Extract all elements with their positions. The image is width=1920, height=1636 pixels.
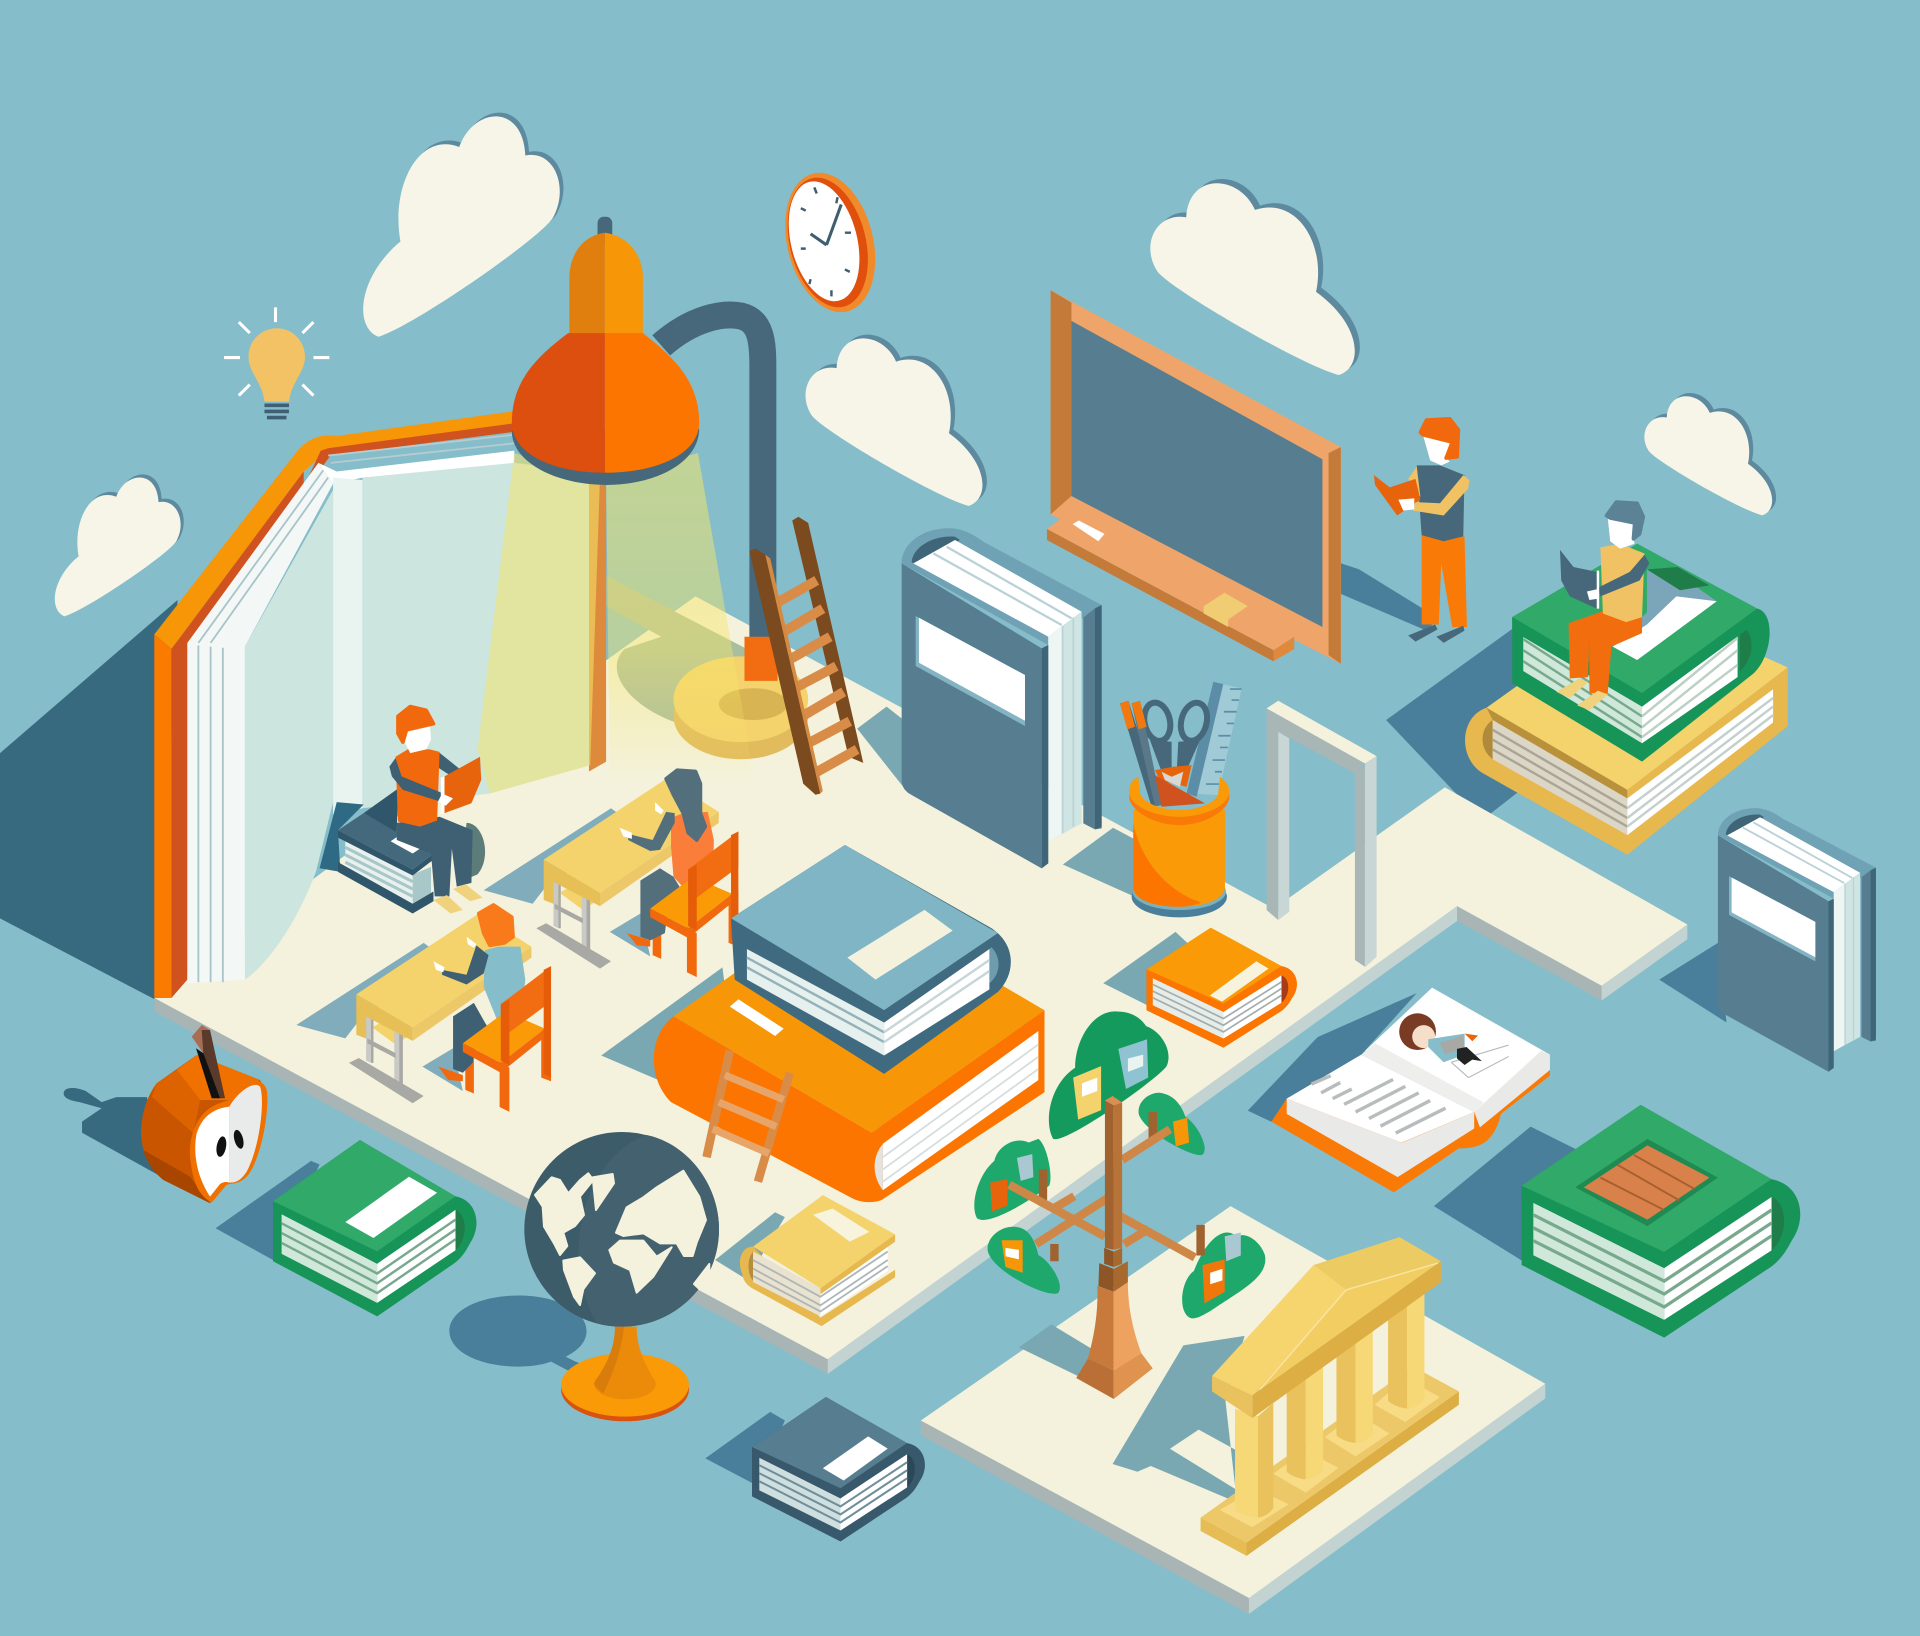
globe bbox=[524, 1132, 719, 1421]
column 1 bbox=[1220, 1403, 1289, 1527]
boy shoe bbox=[438, 1067, 463, 1081]
held book bbox=[444, 757, 481, 813]
left page block bbox=[1287, 1099, 1401, 1177]
desk lamp arm bbox=[661, 315, 763, 649]
pencil cup bbox=[1120, 682, 1242, 917]
floor shadow and cloth bbox=[320, 802, 364, 872]
apple face right bbox=[229, 1085, 262, 1183]
floor shadow: pencil cup bbox=[1063, 828, 1134, 896]
continents bbox=[535, 1171, 709, 1305]
face bbox=[1608, 518, 1635, 549]
upper arm bbox=[1408, 467, 1420, 497]
cloud 1 bbox=[363, 113, 563, 337]
pencils bbox=[1120, 701, 1162, 807]
boy body bbox=[484, 947, 525, 1026]
cover top bright edge bbox=[154, 410, 520, 649]
cloud 2 bbox=[55, 474, 184, 616]
boy legs bbox=[453, 1003, 527, 1073]
column 2 bbox=[1273, 1359, 1338, 1493]
back page surface bbox=[362, 463, 589, 808]
cloud 5 bbox=[1644, 393, 1776, 515]
shadow: apple bbox=[64, 1088, 159, 1176]
girl shoe bbox=[627, 933, 650, 947]
large green book with bench bbox=[1522, 1105, 1800, 1338]
shadow: right book stack bbox=[1386, 625, 1592, 820]
large open book bbox=[154, 410, 606, 998]
big orange book bbox=[654, 894, 1044, 1202]
small dark book bbox=[752, 1397, 925, 1542]
apple top facet bbox=[177, 1055, 260, 1100]
apple body bbox=[141, 1055, 267, 1203]
open book on ground bbox=[1271, 988, 1550, 1192]
small orange book bbox=[1146, 928, 1297, 1048]
shoes bbox=[433, 884, 482, 914]
torso bbox=[1600, 544, 1644, 622]
small yellow book bbox=[740, 1195, 895, 1326]
column 4 bbox=[1375, 1294, 1440, 1422]
floor shadow: blue book bbox=[857, 707, 909, 794]
green book left bbox=[273, 1140, 476, 1316]
wood panel bbox=[1575, 1139, 1718, 1226]
girl arm bbox=[628, 812, 675, 851]
cover side red bbox=[171, 643, 187, 998]
shadow: green book left bbox=[216, 1161, 320, 1260]
tree shadow bbox=[1019, 1324, 1114, 1378]
tree books bbox=[990, 1039, 1241, 1303]
apple mid facet bbox=[152, 1070, 200, 1133]
torso bbox=[396, 749, 440, 827]
door frame bbox=[1267, 701, 1377, 967]
temple bbox=[1201, 1237, 1459, 1556]
cover side orange bbox=[154, 634, 171, 998]
floor shadow: small orange book bbox=[1103, 932, 1194, 1007]
seeds bbox=[215, 1136, 228, 1158]
ladder by lamp bbox=[749, 517, 863, 795]
base ring bbox=[1132, 876, 1227, 917]
ruler bbox=[1188, 682, 1242, 795]
student seated on book with orange book bbox=[320, 707, 485, 914]
shoes bbox=[1556, 678, 1608, 710]
lamp base shadow on floor bbox=[606, 576, 759, 735]
gutter column bbox=[333, 478, 362, 814]
desk and student A bbox=[484, 770, 738, 977]
trunk bbox=[1105, 1101, 1114, 1250]
girl hair bbox=[666, 770, 705, 840]
branches bbox=[1009, 1112, 1201, 1261]
stand bbox=[561, 1357, 689, 1421]
reader standing bbox=[1374, 419, 1469, 643]
floor shadow: orange book bbox=[601, 967, 735, 1102]
eraser bbox=[1204, 593, 1248, 627]
cover bbox=[1271, 1055, 1550, 1192]
chalk bbox=[1073, 520, 1104, 541]
back arm bbox=[435, 752, 463, 779]
lamp base bbox=[673, 637, 808, 759]
base bbox=[1201, 1518, 1247, 1556]
legs bbox=[397, 817, 473, 896]
cup rim bbox=[1129, 792, 1229, 825]
arm bbox=[389, 758, 443, 802]
shoes bbox=[1408, 625, 1464, 643]
tree of books bbox=[974, 1011, 1265, 1399]
seat book bbox=[338, 789, 485, 914]
shadows on ground bbox=[216, 563, 1727, 1485]
wall clock bbox=[771, 163, 889, 322]
cup inside wedge bbox=[1155, 775, 1205, 807]
cloud 3 bbox=[806, 335, 987, 506]
apple lower facet bbox=[143, 1150, 210, 1203]
green book page panel bbox=[1613, 569, 1717, 660]
shadow: dark small book bbox=[705, 1412, 785, 1485]
shadow: right standing book bbox=[1659, 943, 1727, 1022]
scissors bbox=[1141, 700, 1211, 744]
shadow: open book on ground bbox=[1248, 993, 1417, 1122]
shadow: green wood book bbox=[1434, 1127, 1604, 1274]
blue book on orange bbox=[731, 845, 1011, 1074]
lamp light cone bbox=[478, 453, 753, 794]
dark book label bbox=[823, 1436, 888, 1480]
reader sitting on stack bbox=[1556, 502, 1649, 710]
boy arm bbox=[442, 945, 489, 985]
standing book large bbox=[902, 528, 1102, 868]
right page bbox=[1365, 988, 1550, 1112]
column 3 bbox=[1325, 1324, 1389, 1456]
cover back vertical bbox=[589, 484, 606, 771]
main floor platform bbox=[154, 596, 1687, 1374]
sphere bbox=[524, 1132, 719, 1327]
hair bbox=[1607, 502, 1643, 539]
hand bbox=[1398, 498, 1414, 511]
hair bbox=[398, 707, 433, 742]
hair bbox=[1420, 419, 1458, 458]
desk and student B bbox=[296, 905, 551, 1112]
standing book right bbox=[1718, 808, 1876, 1072]
lower platform bbox=[921, 1206, 1545, 1614]
face bbox=[1423, 435, 1452, 465]
girl body bbox=[671, 812, 714, 893]
torso bbox=[1417, 465, 1464, 541]
legs bbox=[1569, 610, 1642, 693]
apple face rim bbox=[190, 1081, 267, 1203]
tree clouds bbox=[974, 1011, 1265, 1318]
chalkboard bbox=[1047, 290, 1341, 664]
shadow: standing reader bbox=[1341, 563, 1439, 631]
temple shadow bbox=[1113, 1336, 1245, 1502]
shadow: globe bbox=[449, 1296, 594, 1378]
icon: light bulb bbox=[224, 307, 329, 418]
girl hands bbox=[620, 802, 664, 839]
cup body bbox=[1133, 810, 1225, 907]
held book bbox=[1560, 550, 1597, 609]
shadow: large open book bbox=[0, 600, 178, 1002]
stem bbox=[192, 1025, 210, 1053]
green book label bbox=[345, 1177, 437, 1238]
figure in book bbox=[1399, 1013, 1509, 1078]
lamp shade bbox=[512, 217, 699, 485]
arm bbox=[1413, 475, 1469, 516]
legs bbox=[1422, 535, 1467, 627]
right stack yellow book bbox=[1465, 600, 1788, 855]
left pages bbox=[187, 463, 333, 983]
roof bbox=[1252, 1261, 1441, 1418]
held book bbox=[1374, 475, 1420, 516]
small ladder on orange book bbox=[707, 1051, 790, 1182]
arm bbox=[1598, 555, 1649, 596]
left page surface bbox=[245, 490, 333, 980]
neck and face bbox=[405, 724, 431, 753]
cloud 4 bbox=[1150, 179, 1360, 375]
boy hands bbox=[433, 937, 476, 972]
boy hair bbox=[479, 905, 513, 945]
girl legs bbox=[640, 868, 715, 940]
apple bbox=[141, 1025, 267, 1203]
right stack green book bbox=[1512, 544, 1770, 762]
orange book label bbox=[1210, 961, 1269, 1002]
tree and temple shadows on platform bbox=[1019, 1324, 1245, 1502]
apple face left bbox=[195, 1107, 229, 1197]
cover inner edge bbox=[171, 422, 520, 649]
floor shadow: yellow small book bbox=[715, 1212, 785, 1280]
